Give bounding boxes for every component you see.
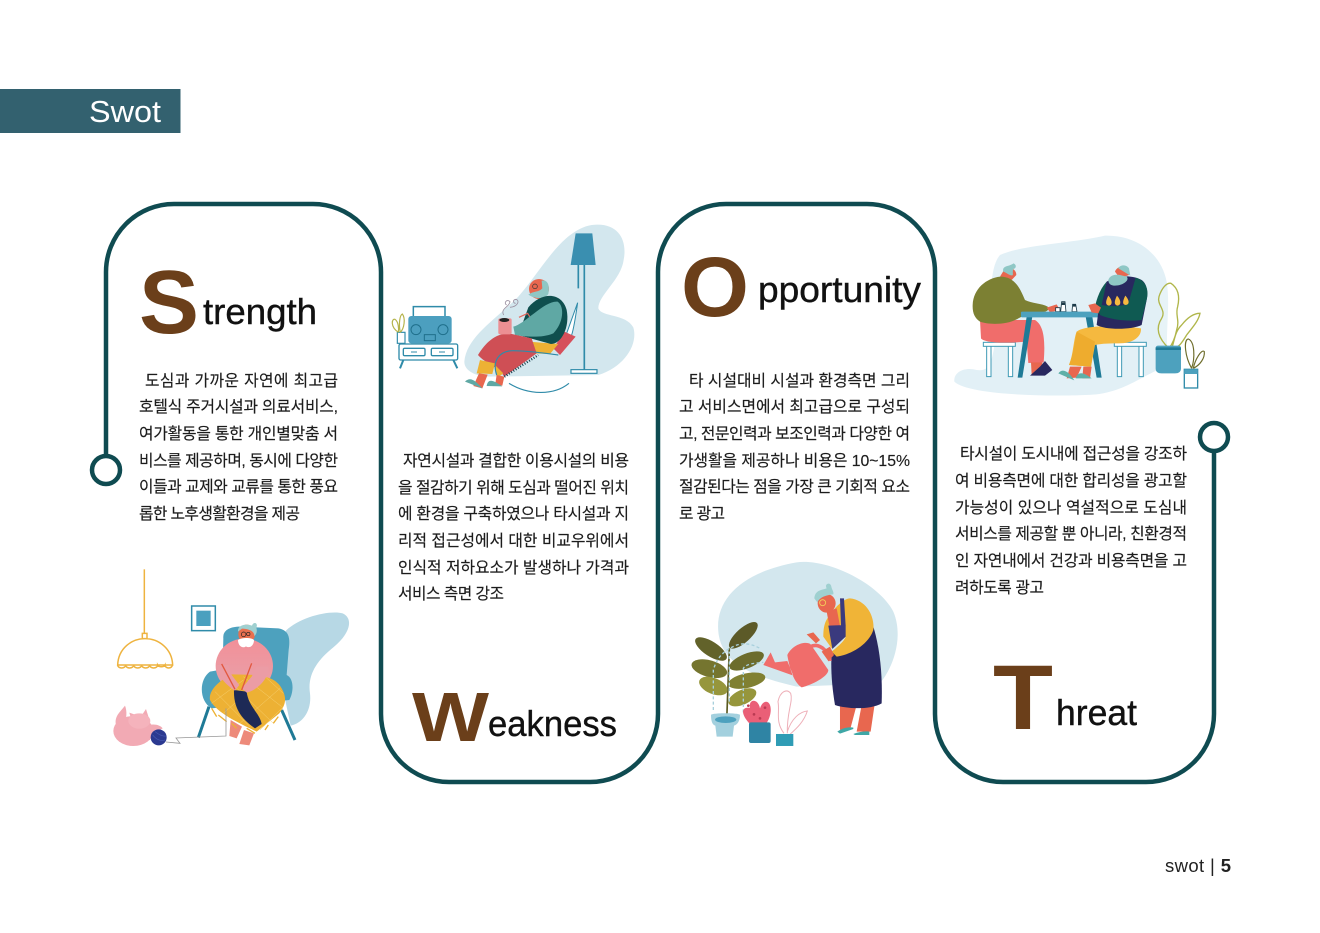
text block: opportunity description [679,372,910,523]
illustration: woman watering plants [689,562,898,746]
text block: threat description: 여 비용측면에 대한 합리성을 광고할 [955,472,1187,490]
heading: Weakness [412,678,617,756]
text block: weakness description: 서비스 측면 강조 [398,585,504,603]
text block: strength description: 이들과 교제와 교류를 통한 풍요 [139,478,338,496]
text block: weakness description: 리적 접근성에서 대한 비교우위에서 [398,532,629,550]
text block: weakness description [398,452,629,603]
text block: weakness description: 을 절감하기 위해 도심과 떨어진 위치 [398,479,629,497]
heading: Threat: T [993,647,1053,749]
text block: strength description: 비스를 제공하며, 동시에 다양한 [139,452,338,470]
illustration: man in rocking chair [392,225,634,392]
text block: strength description [139,372,338,523]
illustration: two men playing chess [954,236,1204,396]
text block: opportunity description: 로 광고 [679,505,725,523]
text block: weakness description: 자연시설과 결합한 이용시설의 비용 [403,452,629,470]
text block: weakness description: 인식적 저하요소가 발생하나 가격과 [398,559,629,577]
text block: strength description: 호텔식 주거시설과 의료서비스, [139,398,338,416]
text block: threat description: 서비스를 제공할 뿐 아니라, 친환경적 [955,525,1187,543]
text block: weakness description: 에 환경을 구축하였으나 타시설과 지 [398,505,629,523]
title banner: Swot [89,94,161,129]
text block: threat description: 인 자연내에서 건강과 비용측면을 고 [955,552,1187,570]
footer page number: swot | 5 [1165,855,1231,876]
text block: threat description [955,445,1187,597]
text block: opportunity description: 고, 전문인력과 보조인력과 다양한 여 [679,425,910,443]
heading: Opportunity [681,240,921,334]
panel: weakness [392,225,634,756]
text block: strength description: 도심과 가까운 자연에 최고급 [145,372,338,390]
heading: Weakness: W [412,678,489,756]
text block: opportunity description: 절감된다는 점을 가장 큰 기회적 요소 [679,478,910,496]
heading: Threat [993,647,1137,749]
text block: threat description: 가능성이 있으나 역설적으로 도심내 [955,499,1187,517]
panel: threat [954,236,1204,749]
panel: opportunity [679,240,921,746]
text block: opportunity description: 가생활을 제공하나 비용은 10~15% [679,452,910,470]
heading: Strength: S [139,253,199,353]
text block: threat description: 타시설이 도시내에 접근성을 강조하 [960,445,1187,463]
panel: strength [113,253,349,746]
heading: Strength [139,253,317,353]
text block: strength description: 여가활동을 통한 개인별맞춤 서 [139,425,338,443]
heading: Opportunity: O [681,240,749,334]
text block: threat description: 려하도록 광고 [955,579,1044,597]
text block: opportunity description: 타 시설대비 시설과 환경측면 그리 [689,372,910,390]
heading: Threat: hreat [1056,692,1137,733]
heading: Opportunity: pportunity [758,269,921,310]
text block: opportunity description: 고 서비스면에서 최고급으로 구성되 [679,398,910,416]
text block: strength description: 롭한 노후생활환경을 제공 [139,505,300,523]
heading: Strength: trength [203,291,317,332]
illustration: woman knitting with cat [113,569,349,746]
connected panel outline [92,204,1228,782]
heading: Weakness: eakness [488,703,617,744]
title banner [0,89,180,133]
